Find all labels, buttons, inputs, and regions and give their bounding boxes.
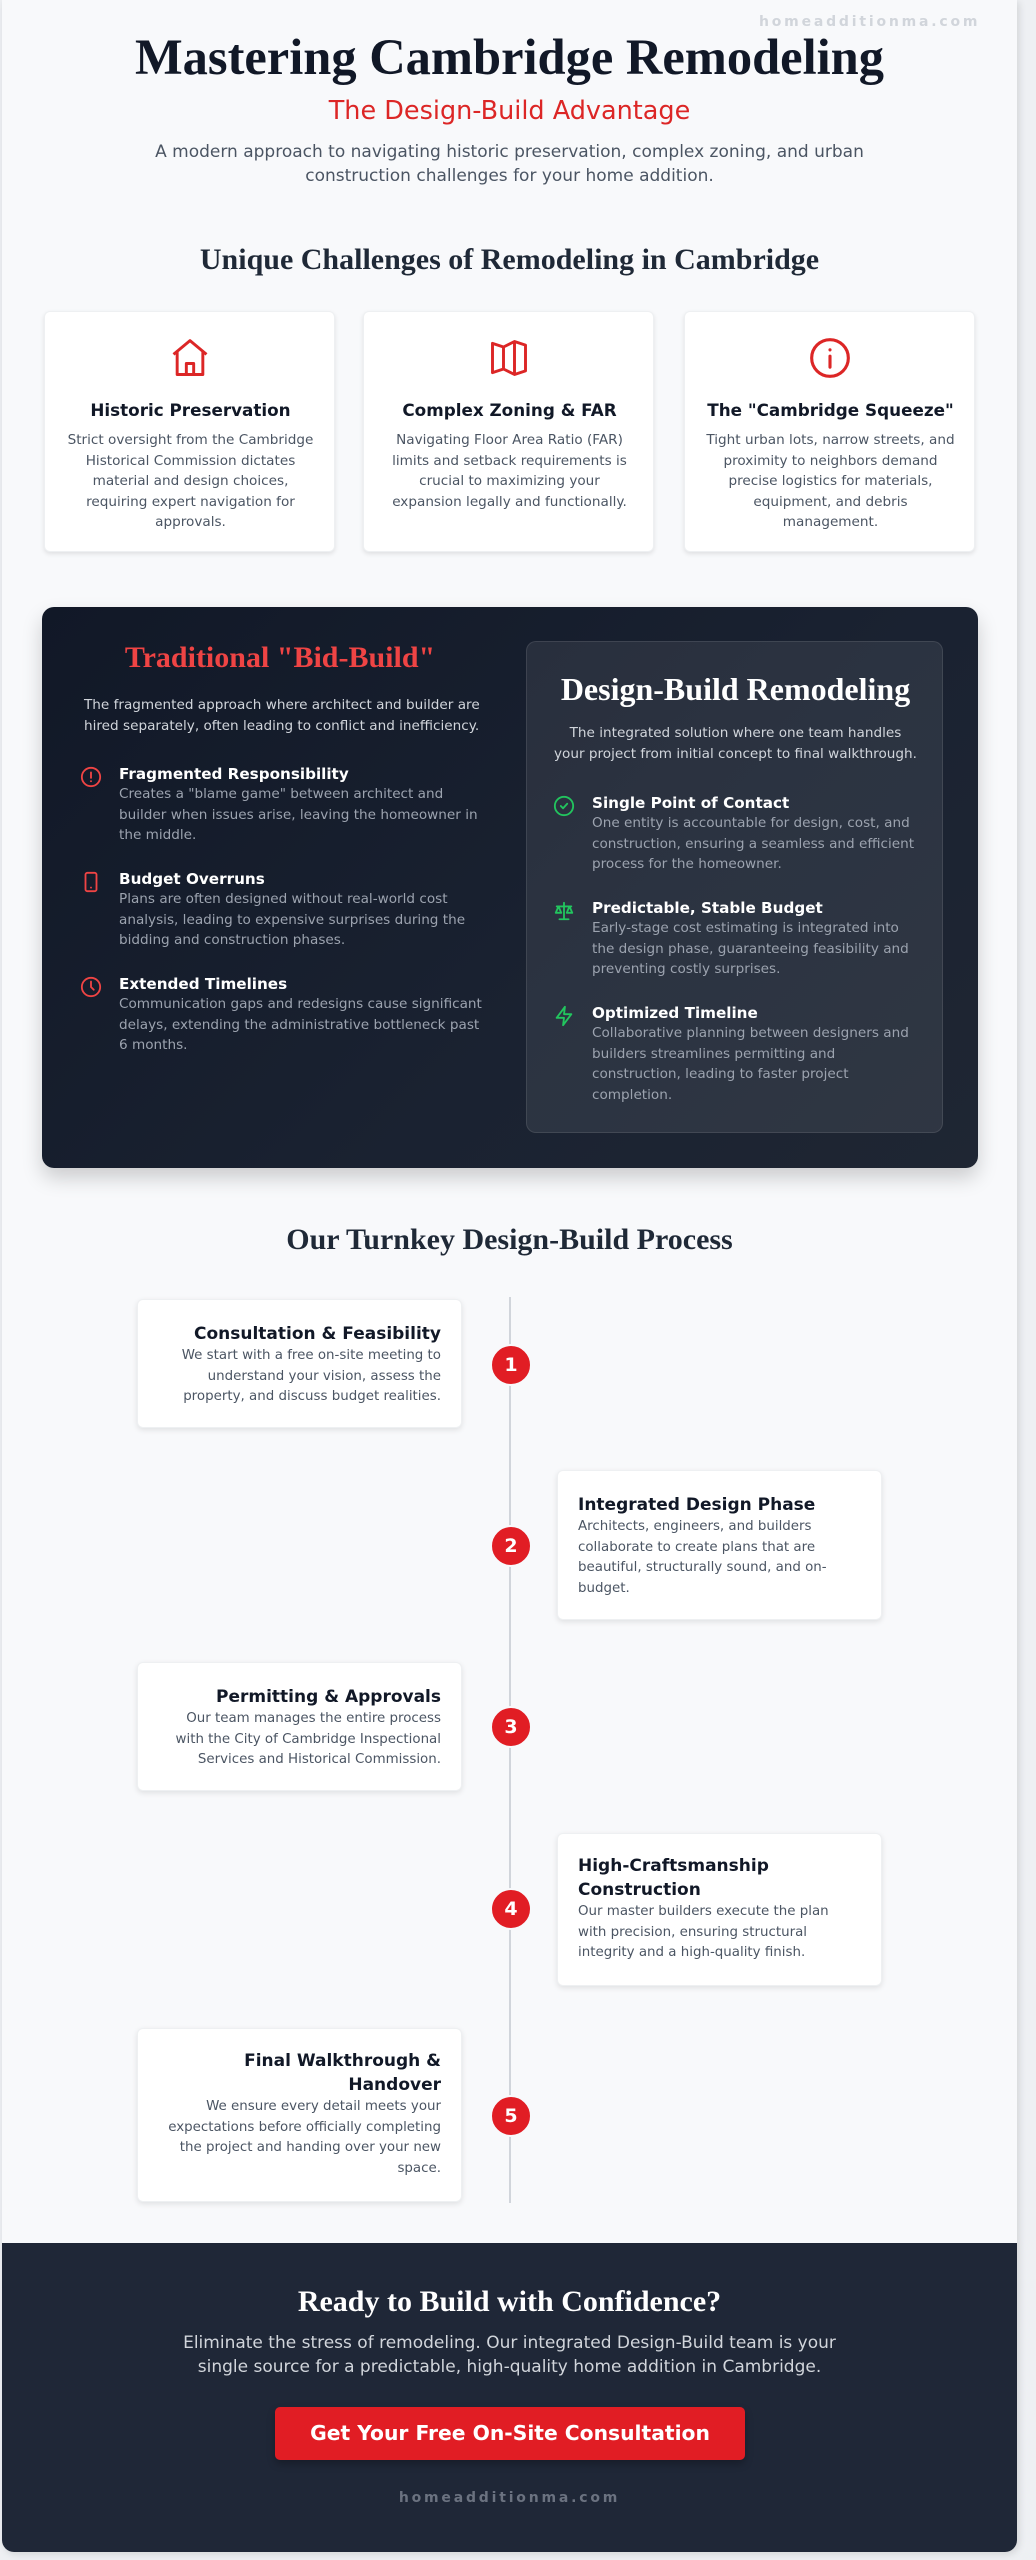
subtitle: The Design-Build Advantage: [329, 96, 690, 126]
icon: scale: [554, 902, 574, 920]
step 5 number: [490, 2095, 532, 2137]
card title: The "Cambridge Squeeze": [707, 400, 954, 420]
card text: expansion legally and functionally.: [392, 494, 627, 510]
card title: Complex Zoning & FAR: [402, 400, 617, 420]
step 2 card: beautiful, structurally sound, and on-: [578, 1560, 827, 1575]
card text: requiring expert navigation for: [86, 494, 295, 510]
footer: call to action: [2, 2243, 1017, 2552]
step 2 card: [557, 1470, 882, 1620]
card text: approvals.: [155, 514, 226, 530]
item: budget overruns: [84, 870, 465, 948]
step 5 card: space.: [397, 2160, 441, 2176]
item: optimized timeline: builders streamlines permitting and: [592, 1046, 835, 1062]
item: optimized timeline: Optimized Timeline: [592, 1004, 758, 1022]
item: single point: process for the homeowner.: [592, 856, 782, 872]
cta button: [275, 2407, 745, 2460]
item: extended timelines: delays, extending the administrative bottleneck past: [119, 1016, 479, 1032]
step 1 card: Consultation & Feasibility: [194, 1324, 441, 1344]
step 5 number: 5: [504, 2105, 518, 2127]
item: stable budget: Early-stage cost estimating is integrated into: [592, 920, 899, 936]
cta text: single source for a predictable, high-quality home addition in Cambridge.: [198, 2356, 821, 2376]
item: optimized timeline: [556, 1004, 909, 1102]
intro text: [155, 142, 864, 186]
step 3 card: Our team manages the entire process: [186, 1711, 441, 1726]
item: budget overruns: Plans are often designed without real-world cost: [119, 891, 448, 907]
card text: Tight urban lots, narrow streets, and: [706, 432, 955, 448]
item: stable budget: [554, 899, 909, 977]
step 2 card: collaborate to create plans that are: [578, 1540, 815, 1554]
icon: clock: [80, 976, 102, 998]
heading: challenges: Unique Challenges of Remodeling in Cambridge: [200, 243, 819, 276]
step 3 number: 3: [504, 1716, 518, 1738]
card text: limits and setback requirements is: [392, 452, 627, 468]
card title: Historic Preservation: [90, 400, 291, 420]
step 3 card: Services and Historical Commission.: [198, 1752, 441, 1767]
step 4 card: integrity and a high-quality finish.: [578, 1945, 805, 1960]
item: stable budget: the design phase, guaranteeing feasibility and: [592, 940, 909, 956]
step 2 number: [490, 1525, 532, 1567]
watermark bottom: homeadditionma.com: [399, 2490, 620, 2506]
card text: [392, 432, 627, 510]
step 2 card: Integrated Design Phase: [578, 1495, 815, 1515]
step 5 card: We ensure every detail meets your: [206, 2099, 441, 2114]
item: single point: [554, 794, 914, 872]
step 5 card: Handover: [348, 2075, 441, 2095]
text: design-build desc: The integrated solution where one team handles: [570, 725, 901, 741]
item: stable budget: Predictable, Stable Budget: [592, 899, 823, 917]
card: squeeze: [684, 311, 975, 552]
text: traditional desc: hired separately, often leading to conflict and inefficiency.: [84, 718, 479, 734]
item: stable budget: preventing costly surprises.: [592, 961, 780, 977]
item: fragmented responsibility: Fragmented Responsibility: [119, 765, 349, 783]
item: optimized timeline: Collaborative planning between designers and: [592, 1025, 909, 1041]
card text: Historical Commission dictates: [86, 452, 295, 468]
item: extended timelines: 6 months.: [119, 1037, 188, 1053]
step 5 card: expectations before officially completing: [168, 2120, 441, 2134]
step 3 card: Permitting & Approvals: [216, 1687, 441, 1707]
step 4 card: Our master builders execute the plan: [578, 1904, 829, 1919]
item: fragmented responsibility: builder when issues arise, leaving the homeowner in: [119, 806, 478, 822]
heading: traditional: Traditional "Bid-Build": [125, 641, 435, 674]
title: Mastering Cambridge Remodeling: [135, 29, 884, 85]
cta button: Get Your Free On-Site Consultation: [310, 2421, 710, 2445]
card text: equipment, and debris: [753, 494, 908, 510]
card text: Strict oversight from the Cambridge: [68, 432, 313, 448]
item: fragmented responsibility: the middle.: [119, 827, 196, 843]
panel: comparison: [42, 607, 978, 1168]
item: budget overruns: analysis, leading to expensive surprises during the: [119, 912, 465, 928]
icon: check: [554, 796, 574, 816]
step 1 card: We start with a free on-site meeting to: [182, 1348, 441, 1363]
icon: alert: [80, 766, 102, 788]
watermark top: homeadditionma.com: [759, 14, 980, 30]
item: budget overruns: bidding and construction phases.: [119, 932, 345, 948]
text: traditional desc: The fragmented approach where architect and builder are: [84, 697, 480, 713]
item: single point: Single Point of Contact: [592, 794, 789, 812]
card: historic preservation: [44, 311, 335, 552]
icon: info: [810, 338, 850, 378]
card text: management.: [783, 514, 878, 530]
intro text: A modern approach to navigating historic preservation, complex zoning, and urban: [155, 142, 864, 162]
item: optimized timeline: construction, leading to faster project: [592, 1066, 849, 1082]
step 2 number: 2: [504, 1535, 518, 1557]
step 4 card: High-Craftsmanship: [578, 1856, 769, 1876]
icon: bolt: [556, 1006, 572, 1026]
card text: [68, 432, 313, 530]
step 1 card: understand your vision, assess the: [208, 1368, 441, 1384]
card text: precise logistics for materials,: [728, 473, 933, 489]
cta text: Eliminate the stress of remodeling. Our integrated Design-Build team is your: [183, 2333, 836, 2353]
step 4 card: with precision, ensuring structural: [578, 1924, 807, 1940]
step 1 card: property, and discuss budget realities.: [183, 1389, 441, 1404]
step 4 card: Construction: [578, 1880, 701, 1900]
timeline: [136, 1297, 883, 2205]
step 5 card: Final Walkthrough &: [244, 2051, 441, 2071]
step 3 number: [490, 1706, 532, 1748]
cta heading: Ready to Build with Confidence?: [298, 2285, 721, 2318]
item: extended timelines: Communication gaps and redesigns cause significant: [119, 996, 482, 1012]
card text: [706, 432, 955, 530]
item: single point: construction, ensuring a seamless and efficient: [592, 836, 914, 852]
text: traditional desc: [84, 697, 480, 734]
intro text: construction challenges for your home addition.: [305, 166, 714, 186]
timeline line: [509, 1297, 511, 2203]
step 3 card: with the City of Cambridge Inspectional: [176, 1732, 441, 1746]
icon: phone: [84, 872, 98, 892]
item: single point: One entity is accountable for design, cost, and: [592, 815, 910, 831]
item: budget overruns: Budget Overruns: [119, 870, 265, 888]
step 1 card: [137, 1299, 462, 1428]
panel: design-build: [526, 641, 943, 1133]
card text: material and design choices,: [93, 473, 288, 489]
step 4 number: 4: [504, 1898, 518, 1920]
item: optimized timeline: completion.: [592, 1086, 672, 1102]
heading: process: Our Turnkey Design-Build Process: [286, 1223, 733, 1256]
item: fragmented responsibility: Creates a "blame game" between architect and: [119, 786, 443, 802]
card text: Navigating Floor Area Ratio (FAR): [396, 432, 623, 448]
step 1 number: [490, 1344, 532, 1386]
heading: design-build: Design-Build Remodeling: [561, 671, 910, 707]
item: extended timelines: [80, 975, 482, 1053]
card text: proximity to neighbors demand: [723, 452, 938, 468]
card text: crucial to maximizing your: [419, 473, 600, 489]
item: fragmented responsibility: [80, 765, 478, 843]
icon: map: [491, 340, 527, 376]
step 2 card: Architects, engineers, and builders: [578, 1519, 812, 1534]
step 3 card: [137, 1662, 462, 1791]
card: zoning: [363, 311, 654, 552]
step 5 card: the project and handing over your new: [180, 2140, 441, 2155]
step 1 number: 1: [504, 1354, 518, 1376]
cta text: [183, 2333, 836, 2376]
step 5 card: [137, 2028, 462, 2202]
step 4 number: [490, 1888, 532, 1930]
text: design-build desc: [554, 725, 917, 762]
step 2 card: budget.: [578, 1580, 630, 1596]
icon: house: [172, 339, 208, 376]
text: design-build desc: your project from initial concept to final walkthrough.: [554, 746, 917, 762]
step 4 card: [557, 1833, 882, 1986]
item: extended timelines: Extended Timelines: [119, 975, 287, 993]
